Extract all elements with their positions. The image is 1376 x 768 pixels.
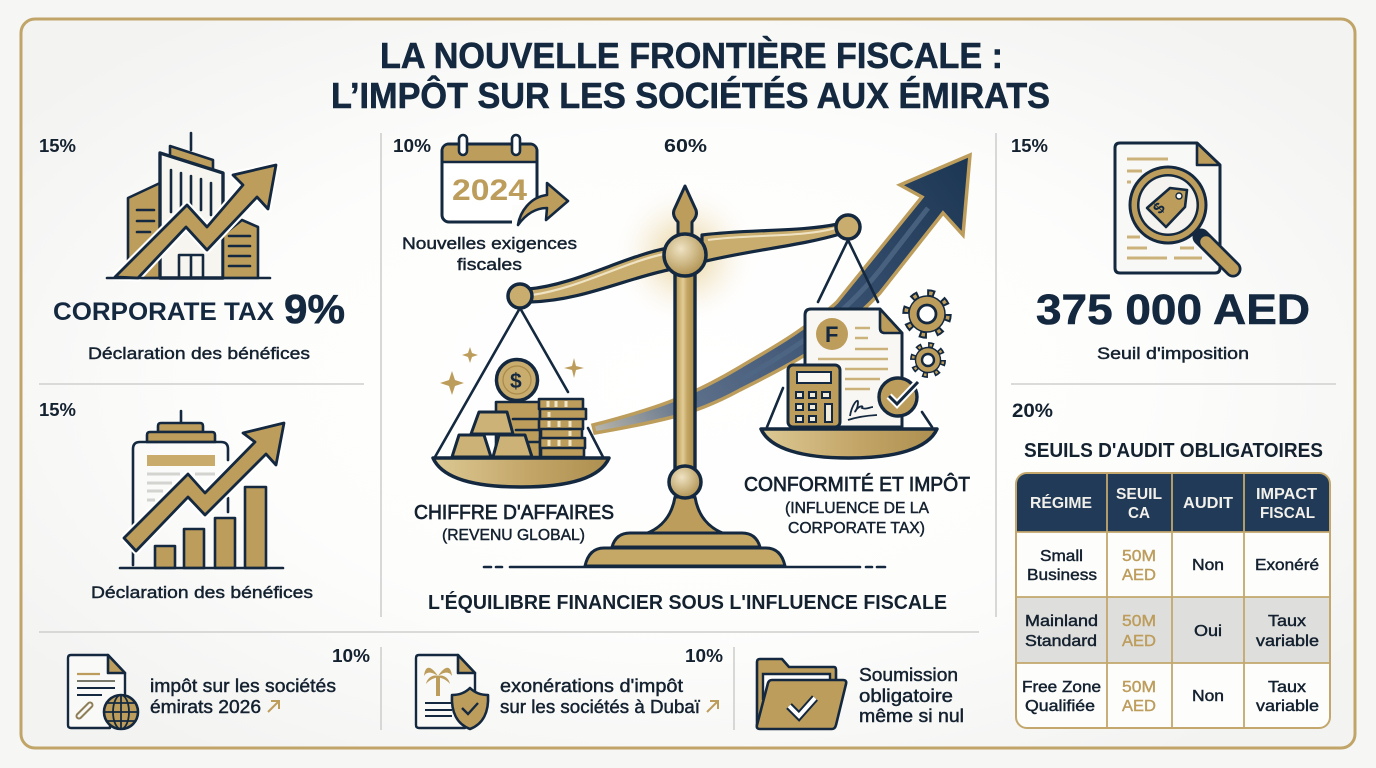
document (805, 309, 902, 427)
label: conformité et impôt: CONFORMITÉ ET IMPÔT (744, 473, 970, 496)
icon: document with palm and shield (416, 655, 488, 729)
calculator (788, 365, 840, 427)
table header: FISCAL (1260, 505, 1315, 522)
caption: Seuil d'imposition (1097, 344, 1249, 363)
front coin stack (539, 399, 586, 457)
table header: CA (1128, 505, 1150, 522)
label: conformité et impôt: (INFLUENCE DE LA (785, 500, 929, 517)
table header (1030, 486, 1317, 522)
row: mainland standard: Oui (1194, 623, 1222, 640)
title: L’IMPÔT SUR LES SOCIÉTÉS AUX ÉMIRATS (331, 74, 1050, 116)
gear large (906, 293, 948, 335)
panel: impôt sur les sociétés (68, 646, 370, 729)
title: LA NOUVELLE FRONTIÈRE FISCALE : (380, 35, 1003, 76)
gold bars (471, 412, 513, 434)
row: mainland standard: AED (1122, 633, 1156, 650)
gear small (913, 345, 943, 375)
icon: folder with check (757, 659, 846, 729)
percent label: 15% (39, 400, 76, 420)
stat: corporate tax 9%: 9% (284, 286, 345, 332)
row: free zone qualifiée (1022, 679, 1319, 715)
text: Soumission (859, 665, 958, 685)
row: mainland standard: variable (1256, 633, 1319, 650)
right strings (767, 240, 932, 427)
caption: Déclaration des bénéfices (88, 344, 310, 363)
link text (500, 676, 718, 717)
table header: SEUIL (1116, 486, 1162, 503)
left tray: gold and coins (433, 347, 609, 487)
row: mainland standard: Taux (1268, 613, 1306, 630)
row: mainland standard: Mainland (1025, 613, 1098, 630)
row: free zone qualifiée: Qualifiée (1025, 698, 1095, 715)
left pan (433, 458, 609, 487)
caption: fiscales (457, 255, 522, 274)
dollar coin (496, 360, 538, 400)
hub (664, 234, 706, 276)
left pivot (508, 284, 532, 308)
row: mainland standard: Standard (1025, 633, 1097, 650)
label: conformité et impôt (744, 473, 970, 537)
table header: IMPACT (1256, 486, 1317, 503)
back coin stack (496, 402, 540, 457)
link text: impôt sur les sociétés (150, 676, 336, 696)
icon: buildings with rising arrow (107, 133, 276, 278)
row: free zone qualifiée: 50M (1122, 679, 1156, 696)
row: small business: AED (1122, 567, 1156, 584)
row: small business: Exonéré (1255, 557, 1319, 574)
percent label: 20% (1012, 401, 1053, 422)
icon: document with link and globe (68, 655, 138, 729)
dollar coin: $ (510, 370, 522, 393)
row: free zone qualifiée: Taux (1268, 679, 1306, 696)
icon: document with magnifier and price tag (1115, 143, 1233, 273)
link text: exonérations d'impôt (500, 676, 683, 696)
row: mainland standard: 50M (1122, 613, 1156, 630)
hub glow (611, 181, 759, 329)
panel: exonérations (416, 646, 723, 729)
document: F (825, 322, 838, 347)
scale finial (674, 186, 696, 236)
label: chiffre d'affaires: CHIFFRE D'AFFAIRES (414, 502, 614, 524)
row: free zone qualifiée: Non (1192, 688, 1224, 705)
icon: calendar 2024: 2024 (452, 174, 527, 207)
title (331, 35, 1050, 116)
stat: corporate tax 9% (53, 286, 345, 332)
heading: SEUILS D'AUDIT OBLIGATOIRES (1024, 440, 1323, 462)
percent label: 10% (685, 646, 723, 666)
table header: AUDIT (1183, 495, 1233, 512)
beam right (702, 224, 840, 262)
text (859, 665, 964, 726)
table (1016, 473, 1330, 728)
percent label: 15% (39, 136, 76, 156)
label: chiffre d'affaires (414, 502, 614, 544)
percent label: 15% (1011, 136, 1048, 156)
link text: sur les sociétés à Dubaï (500, 697, 700, 717)
ground line (484, 566, 885, 568)
link text: émirats 2026 (150, 697, 261, 717)
icon: clipboard with bar chart and arrow (120, 411, 284, 568)
right pan (761, 429, 937, 458)
icon: document with magnifier and price tag: $ (1150, 200, 1169, 218)
link text (150, 676, 336, 717)
table header: RÉGIME (1030, 493, 1092, 512)
signature (848, 401, 877, 420)
panel: nouvelles exigences fiscales (393, 135, 577, 274)
row: small business: Small (1040, 548, 1083, 565)
row: free zone qualifiée: Free Zone (1022, 679, 1101, 696)
arrow: rising navy trend behind scale (593, 155, 970, 433)
row: free zone qualifiée: AED (1122, 698, 1156, 715)
right tray: tax documents (761, 293, 948, 458)
heading: équilibre financier: L'ÉQUILIBRE FINANCIER SOUS L'INFLUENCE FISCALE (428, 591, 947, 614)
caption (402, 234, 577, 274)
right pivot (836, 215, 860, 239)
icon: calendar 2024 (442, 135, 568, 227)
label: conformité et impôt: CORPORATE TAX) (788, 520, 925, 537)
percent label: 10% (393, 136, 431, 156)
row: small business: Non (1192, 557, 1224, 574)
panel: seuils d'audit (1012, 401, 1330, 728)
row: small business: 50M (1122, 548, 1156, 565)
row: mainland standard (1025, 613, 1319, 650)
caption: Déclaration des bénéfices (91, 583, 313, 602)
panel: déclaration des bénéfices (39, 400, 313, 602)
row: small business: Business (1027, 567, 1097, 584)
icon: external link arrow (707, 701, 718, 712)
illustration: balance scale (433, 181, 948, 567)
beam left (528, 248, 668, 302)
left strings (435, 308, 603, 457)
panel: soumission obligatoire (757, 659, 964, 729)
check badge (879, 378, 918, 416)
icon: external link arrow (268, 701, 279, 712)
base knob and flare (585, 466, 785, 566)
text: obligatoire (859, 686, 953, 706)
scale post (675, 270, 695, 470)
stat value: 375 000 AED (1036, 286, 1310, 334)
percent label: 10% (332, 646, 370, 666)
label: chiffre d'affaires: (REVENU GLOBAL) (442, 527, 585, 544)
panel: corporate tax (39, 133, 345, 363)
sparkles (440, 347, 584, 395)
row: small business (1027, 548, 1319, 584)
stat: corporate tax 9%: CORPORATE TAX (53, 298, 274, 326)
panel: seuil d'imposition (1011, 136, 1310, 363)
row: free zone qualifiée: variable (1256, 698, 1319, 715)
percent label: balance: 60% (664, 136, 707, 156)
text: même si nul (859, 706, 964, 726)
caption: Nouvelles exigences (402, 234, 577, 253)
